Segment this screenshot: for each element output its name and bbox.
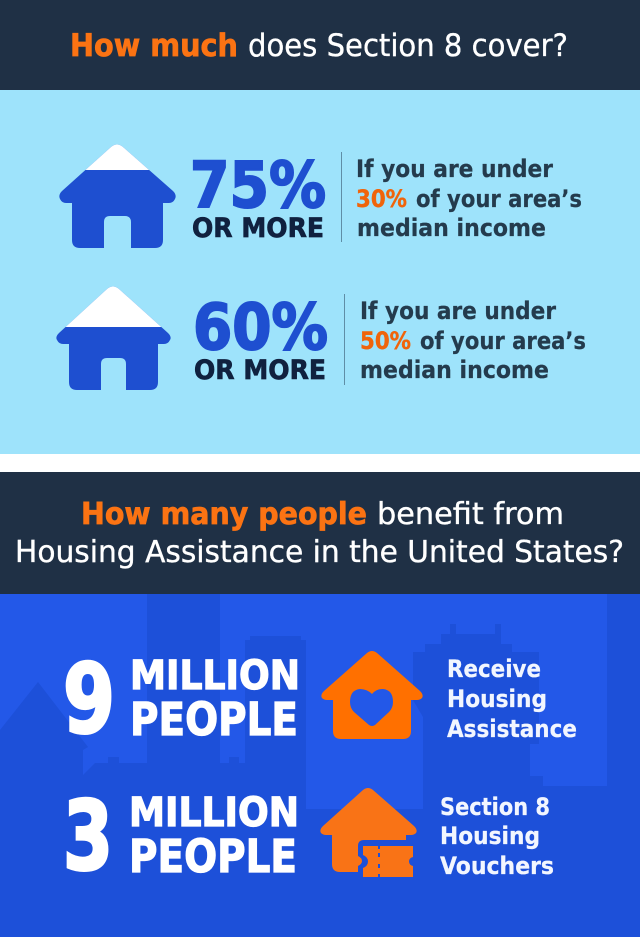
stat: 75 percent or more: OR MORE: [192, 213, 324, 244]
text: under 30 percent: 30%: [356, 185, 407, 213]
header: how many people benefit: Housing Assistance in the United States?: [15, 535, 624, 570]
text: section 8 housing vouchers: [440, 793, 554, 880]
stat: 60 percent or more: OR MORE: [194, 355, 326, 386]
panel: coverage: [0, 90, 640, 454]
stat: 75 percent or more: 75%: [190, 149, 326, 222]
text: receive housing assistance: Housing: [447, 685, 547, 713]
icon: house 75 percent filled: [59, 144, 176, 248]
header: how many people benefit: [0, 472, 640, 594]
stat: 3 million people: 3: [63, 782, 113, 892]
header: how much does Section 8 cover: does Section 8 cover?: [248, 28, 568, 64]
text: under 50 percent: 50%: [360, 327, 411, 355]
stat: 9 million people: MILLION: [130, 653, 300, 699]
stat: 9 million people: 9: [63, 645, 115, 755]
text: under 50 percent: median income: [360, 356, 549, 384]
stat: 3 million people: [63, 782, 299, 892]
text: receive housing assistance: [447, 655, 577, 743]
text: under 30 percent: of your area’s: [416, 185, 582, 213]
stat: 3 million people: MILLION: [129, 790, 299, 836]
text: section 8 housing vouchers: Section 8: [440, 793, 550, 821]
icon: house 60 percent filled: [56, 286, 171, 390]
text: receive housing assistance: Receive: [447, 655, 541, 683]
stat: 3 million people: PEOPLE: [129, 830, 297, 883]
text: under 30 percent: [356, 155, 582, 242]
text: under 50 percent: of your area’s: [420, 327, 586, 355]
stat: 9 million people: PEOPLE: [130, 693, 298, 746]
stat: 9 million people: [63, 645, 300, 755]
text: under 50 percent: If you are under: [360, 297, 556, 325]
text: under 50 percent: [360, 297, 586, 384]
header: how much does Section 8 cover: How much: [70, 28, 238, 64]
text: under 30 percent: median income: [357, 214, 546, 242]
text: receive housing assistance: Assistance: [447, 715, 577, 743]
text: section 8 housing vouchers: Housing: [440, 822, 540, 850]
header: how many people benefit: How many people: [81, 497, 367, 532]
icon: house with voucher ticket: [320, 788, 417, 877]
text: section 8 housing vouchers: Vouchers: [440, 852, 554, 880]
header: how much does Section 8 cover: [0, 0, 640, 90]
stat: 60 percent or more: 60%: [193, 291, 328, 364]
panel: housing assistance numbers: [0, 594, 640, 937]
skyline background: [0, 594, 607, 809]
header: how many people benefit: benefit from: [377, 497, 564, 532]
icon: house with heart: [321, 651, 423, 739]
text: under 30 percent: If you are under: [356, 155, 553, 183]
